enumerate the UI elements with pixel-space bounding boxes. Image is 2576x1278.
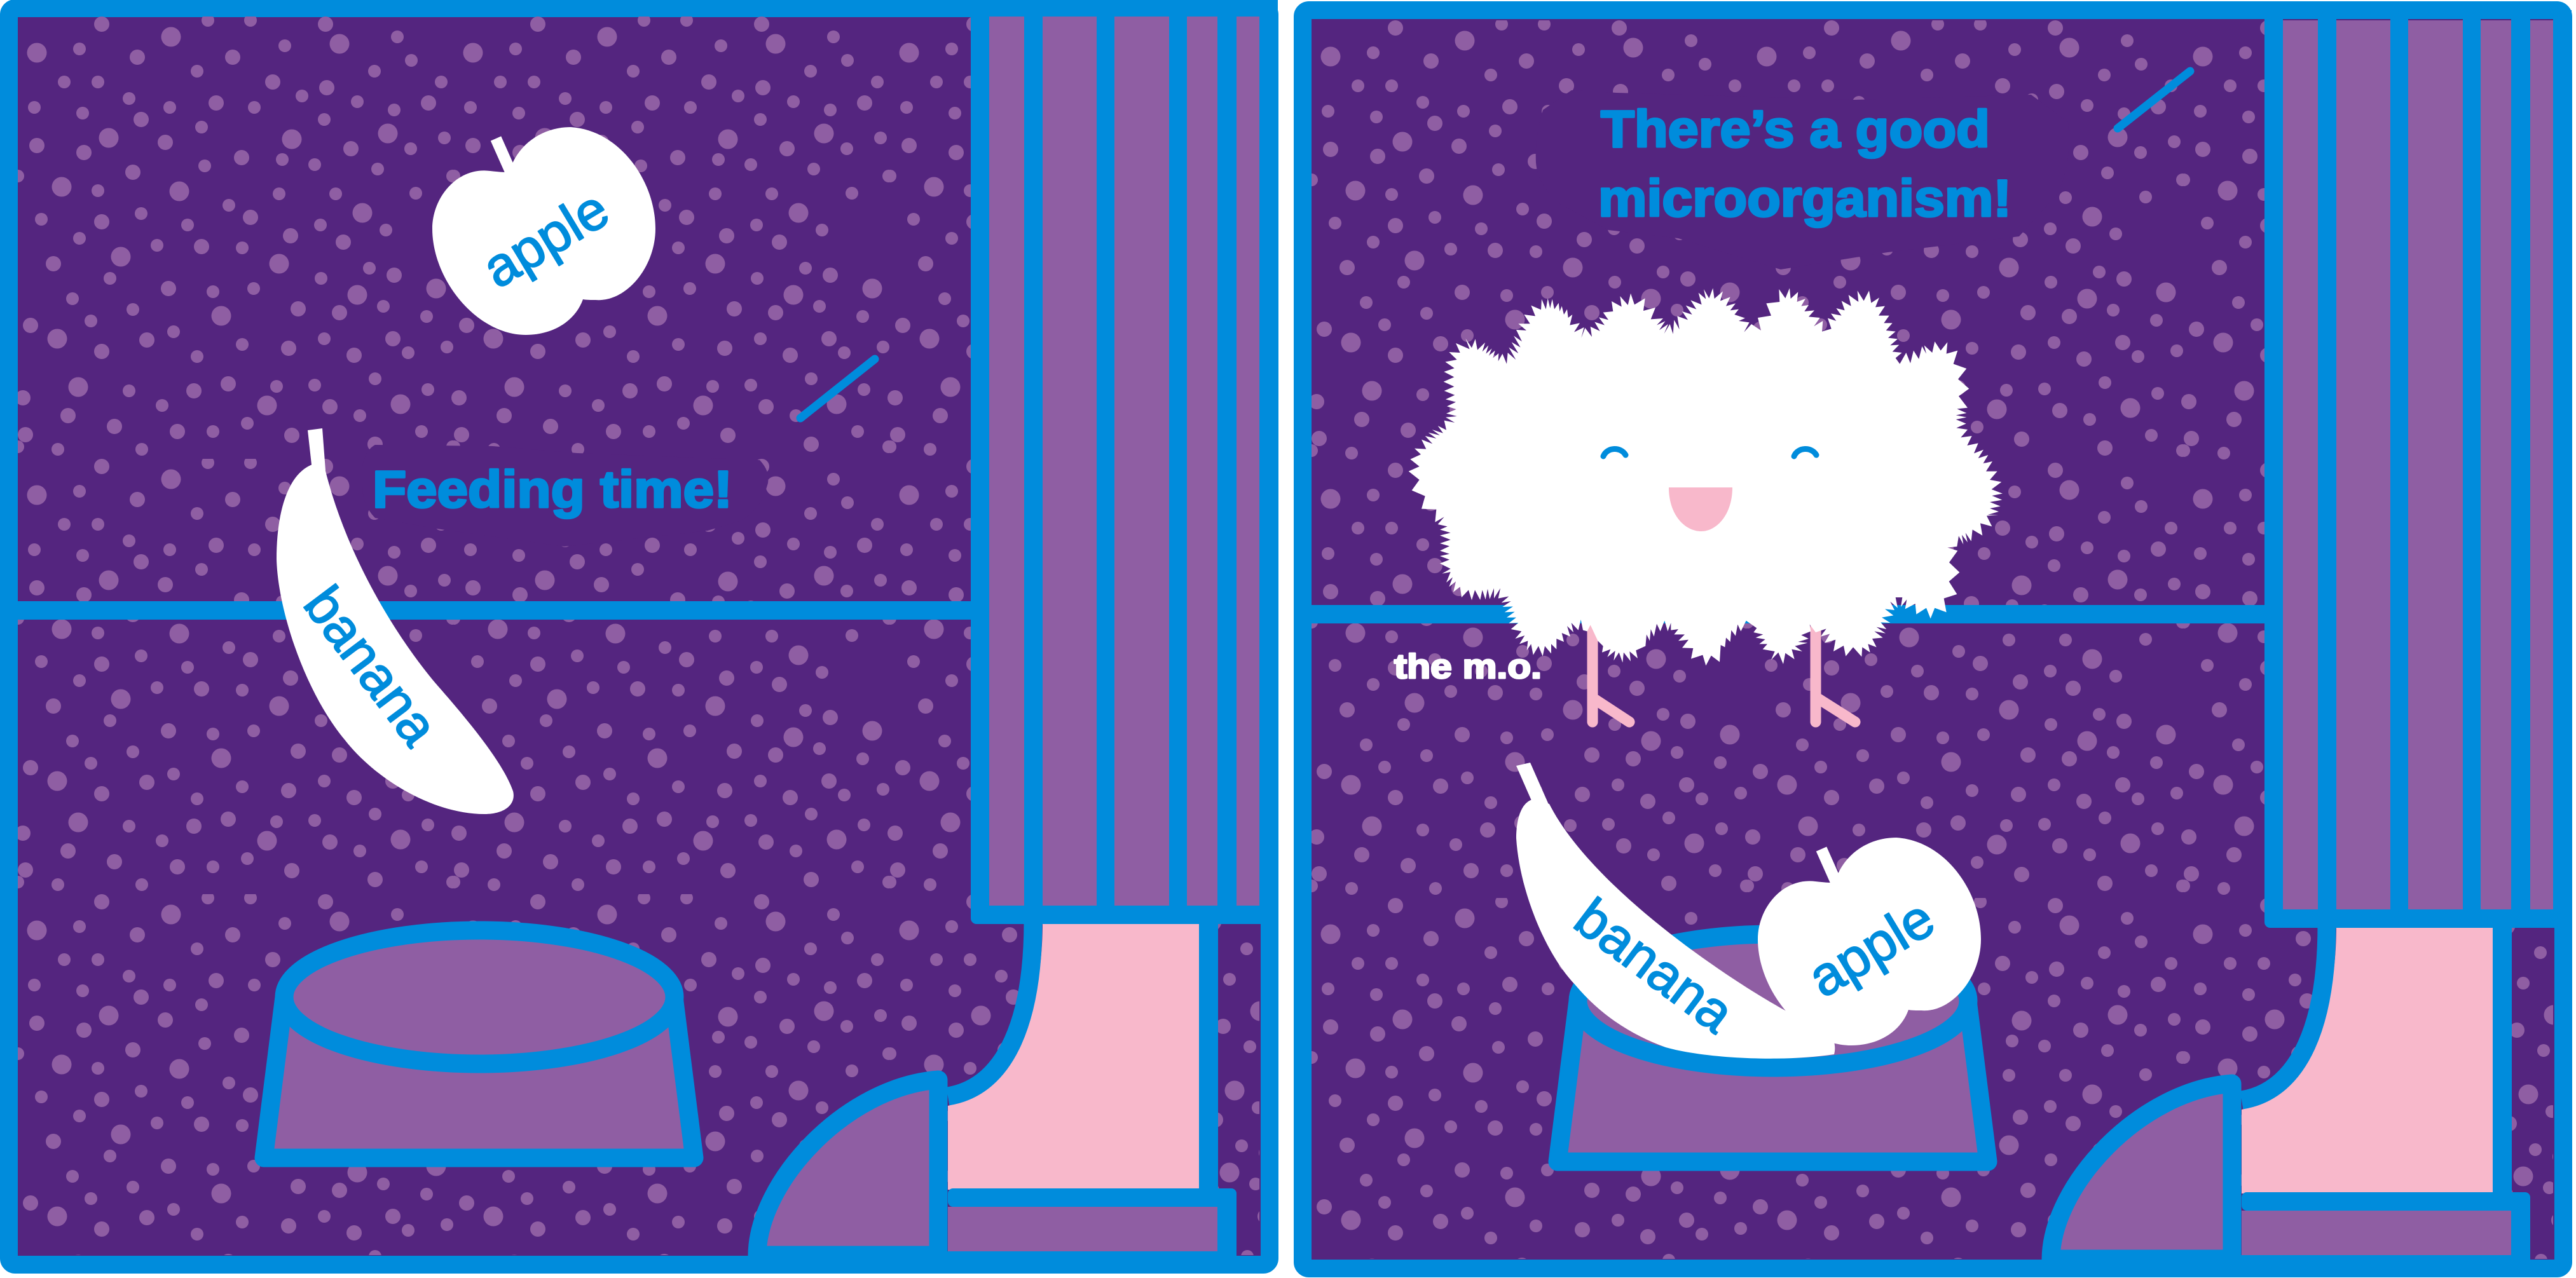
curtain fold lines [2264, 10, 2572, 919]
speech bubble: there's a good microorganism [1536, 90, 2069, 269]
speech tail line [2118, 71, 2190, 128]
microorganism character [1409, 288, 2003, 722]
right leg [1816, 610, 1855, 722]
bubble backing [1536, 90, 2069, 269]
curtain fold lines [971, 0, 1278, 915]
banana label: banana [1564, 887, 1745, 1045]
speckled dot pattern lower [18, 806, 1259, 1255]
pink leg [2242, 925, 2495, 1193]
panel: feeding time [9, 0, 1278, 1265]
apple label: apple [472, 178, 619, 300]
window sill line [18, 601, 971, 620]
shoe sole [948, 1207, 1217, 1251]
banana body [1516, 799, 1835, 1059]
banana body [277, 465, 514, 814]
curtain hem [2264, 909, 2572, 928]
bowl rim [1578, 934, 1968, 1068]
speckled dot pattern upper [18, 17, 1259, 806]
bowl body [1558, 1001, 1988, 1162]
banana [277, 428, 514, 814]
shoe heel band [2242, 1192, 2530, 1211]
curtain cloth [2264, 20, 2572, 910]
curtain [2264, 10, 2572, 928]
leg front curve [2242, 925, 2327, 1100]
pink leg [948, 921, 1202, 1190]
label: the m.o.: the m.o. [1394, 648, 1542, 686]
shoe toe [757, 1080, 938, 1255]
bowl [1558, 934, 1988, 1162]
window wall background [9, 8, 1270, 1265]
shoe sole edge [2043, 1199, 2530, 1261]
foot and leg [749, 921, 1237, 1257]
leg back outline [2493, 925, 2512, 1195]
scene backdrop [1303, 10, 2572, 1268]
apple stem [496, 139, 511, 173]
banana stem [308, 428, 325, 470]
left eye [1603, 449, 1626, 456]
shoe heel band [948, 1188, 1237, 1207]
speech tail line [800, 359, 875, 418]
spiky white body [1409, 288, 2003, 665]
banana [1516, 763, 1835, 1059]
curtain [971, 0, 1278, 924]
window wall background [1303, 10, 2563, 1268]
shoe toe [2051, 1084, 2232, 1259]
apple body [1758, 838, 1981, 1045]
foot and leg [2043, 925, 2530, 1261]
bubble backing [362, 445, 768, 547]
right eye [1794, 449, 1816, 456]
shoe sole edge [749, 1195, 1237, 1257]
apple label: apple [1798, 887, 1945, 1009]
apple body [432, 127, 655, 335]
bowl [264, 930, 694, 1158]
shoe sole [2242, 1211, 2511, 1255]
leg back outline [1199, 921, 1218, 1192]
mouth [1669, 487, 1732, 531]
speech bubble: feeding time [362, 445, 768, 547]
banana label: banana [292, 575, 450, 757]
apple [1758, 838, 1981, 1045]
bowl rim [284, 930, 675, 1064]
apple [432, 127, 655, 335]
speckled dot pattern lower [1312, 810, 2553, 1259]
speech text line 2: microorganism! [1598, 170, 2011, 228]
apple stem [1821, 849, 1837, 883]
speech text line 1: There’s a good [1601, 100, 1990, 158]
window sill line [1312, 605, 2265, 623]
panel: there's a good microorganism [1303, 10, 2572, 1268]
left leg [1593, 610, 1629, 722]
leg front curve [948, 921, 1033, 1096]
curtain cloth [971, 17, 1278, 906]
speckled dot pattern upper [1312, 20, 2553, 810]
curtain hem [971, 906, 1278, 924]
bowl body [264, 997, 694, 1158]
banana stem [1516, 763, 1549, 806]
speech text: Feeding time! [373, 461, 732, 519]
